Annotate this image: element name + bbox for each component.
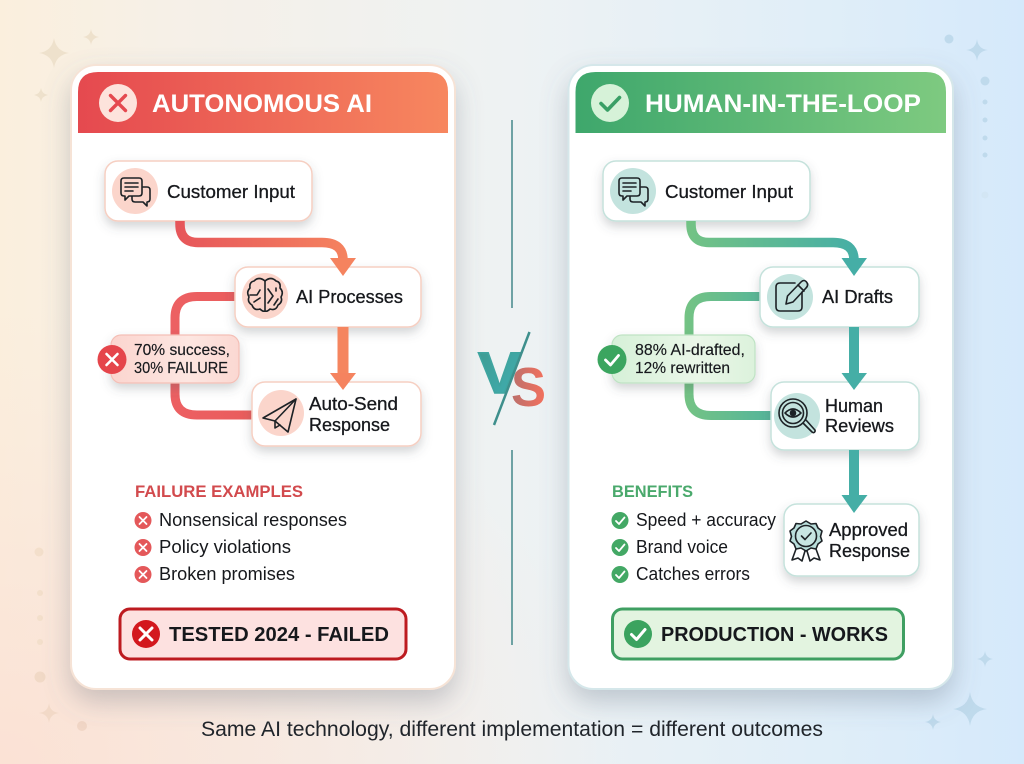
center VS divider	[478, 120, 546, 645]
callout: 88% AI-drafted, 12% rewritten: 88% AI-drafted,	[635, 342, 745, 359]
callout: 70% success, 30% failure: 30% FAILURE	[134, 360, 228, 377]
caption: Same AI technology, different implementation = different outcomes	[201, 718, 823, 741]
arrow: AI drafts to human reviews	[842, 327, 867, 390]
status badge: production works: PRODUCTION - WORKS	[661, 623, 888, 646]
callout: 70% success, 30% failure: 70% success,	[134, 342, 230, 359]
header: autonomous AI	[78, 72, 448, 133]
box: auto-send response	[252, 382, 421, 446]
icon: chat bubbles	[121, 178, 150, 206]
box: auto-send response: Auto-Send	[309, 393, 398, 414]
box: AI drafts: AI Drafts	[822, 286, 893, 307]
list: benefits: Catches errors	[636, 563, 750, 584]
decorative sparkles and dots: left	[34, 29, 99, 731]
VS mark: S	[511, 356, 546, 418]
icon: paper plane	[263, 399, 296, 432]
icon: chat bubbles	[619, 178, 648, 206]
box: customer input: Customer Input	[665, 181, 793, 202]
heading: failure examples: FAILURE EXAMPLES	[135, 482, 303, 501]
box: approved response: Response	[829, 540, 910, 561]
list: benefits	[612, 509, 777, 584]
panel: human-in-the-loop	[568, 65, 953, 689]
header: human-in-the-loop	[576, 72, 946, 133]
box: customer input: Customer Input	[167, 181, 295, 202]
arrow: input to AI processes	[180, 221, 356, 276]
panel: autonomous AI	[71, 65, 455, 689]
list: failure examples: Policy violations	[159, 536, 291, 557]
box: AI drafts	[760, 267, 919, 327]
box: customer input	[603, 161, 810, 221]
callout: 70% success, 30% failure	[98, 335, 239, 383]
box: AI processes	[235, 267, 421, 327]
callout: 88% AI-drafted, 12% rewritten	[598, 335, 755, 383]
review loop connector	[689, 296, 771, 416]
icon: pencil on paper	[776, 280, 808, 311]
box: human reviews	[771, 382, 919, 450]
arrow: AI processes to auto-send	[330, 327, 356, 390]
box: human reviews: Reviews	[825, 415, 894, 436]
box: approved response: Approved	[829, 519, 908, 540]
status badge: production works	[612, 609, 904, 659]
list: failure examples: Nonsensical responses	[159, 509, 347, 530]
header: human-in-the-loop: HUMAN-IN-THE-LOOP	[645, 90, 921, 118]
box: approved response	[784, 504, 919, 576]
icon: brain	[248, 278, 282, 311]
decorative sparkles and dots: right	[925, 34, 993, 730]
list: failure examples	[134, 509, 347, 584]
status badge: tested 2024 failed	[120, 609, 406, 659]
box: customer input	[105, 161, 312, 221]
icon: magnifier with eye	[779, 399, 815, 433]
callout: 88% AI-drafted, 12% rewritten: 12% rewritten	[635, 360, 730, 377]
header: autonomous AI: AUTONOMOUS AI	[152, 90, 372, 118]
box: AI processes: AI Processes	[296, 286, 403, 307]
panel card: autonomous AI	[71, 65, 455, 689]
list: benefits: Brand voice	[636, 536, 728, 557]
arrow: input to AI drafts	[691, 221, 867, 276]
VS mark	[478, 332, 546, 425]
failure loop connector	[175, 296, 252, 415]
icon: award ribbon	[790, 521, 822, 561]
box: human reviews: Human	[825, 395, 883, 416]
panel card: human-in-the-loop	[568, 65, 953, 689]
list: benefits: Speed + accuracy	[636, 509, 777, 530]
box: auto-send response: Response	[309, 414, 390, 435]
list: failure examples: Broken promises	[159, 563, 295, 584]
arrow: human reviews to approved response	[842, 450, 868, 513]
heading: benefits: BENEFITS	[612, 482, 693, 501]
status badge: tested 2024 failed: TESTED 2024 - FAILED	[169, 623, 389, 646]
VS mark: V	[478, 341, 521, 406]
